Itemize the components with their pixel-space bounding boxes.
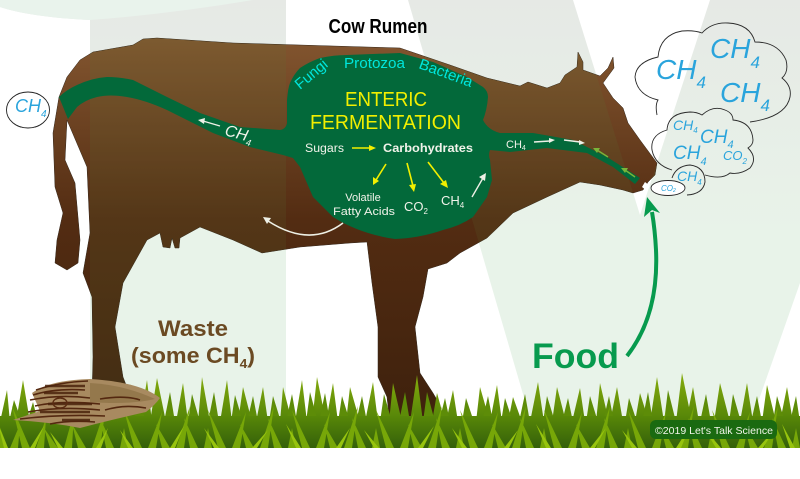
large methane cloud: CH	[710, 33, 750, 64]
food label: Food	[532, 337, 619, 376]
large methane cloud: 4	[750, 53, 760, 72]
tiny carbon dioxide cloud	[651, 180, 685, 196]
fermentation flow text: 4	[522, 145, 526, 152]
fermentation flow text: CH	[506, 139, 522, 151]
large methane cloud: CH	[656, 54, 696, 85]
waste label	[131, 316, 255, 371]
medium methane cloud: 4	[727, 139, 734, 151]
microbe labels: Protozoa	[344, 55, 406, 72]
medium methane cloud: CH	[700, 127, 727, 148]
medium methane cloud: CO	[723, 148, 742, 163]
medium methane cloud: CH	[673, 117, 693, 133]
tall grass tips	[0, 373, 793, 422]
heading: enteric fermentation: FERMENTATION	[310, 112, 461, 134]
waste label: 4	[240, 356, 248, 371]
mid grass blades	[0, 406, 800, 448]
large methane cloud: CH	[720, 77, 760, 108]
small methane cloud: CH	[677, 168, 697, 184]
small methane cloud: 4	[697, 178, 702, 187]
heading: enteric fermentation	[310, 89, 461, 134]
fermentation flow text: 2	[424, 207, 428, 216]
waste label: )	[247, 343, 255, 368]
left methane bubble	[6, 92, 50, 128]
microbe labels: Fungi	[292, 56, 331, 93]
fermentation flow text: Volatile	[345, 192, 381, 204]
rumen and digestive tract	[59, 53, 640, 239]
tiny carbon dioxide cloud: 2	[672, 188, 676, 194]
copyright badge	[650, 420, 777, 439]
yellow arrows	[352, 145, 448, 192]
grass base band	[0, 416, 800, 448]
cow	[52, 38, 658, 416]
medium methane cloud: 4	[700, 156, 707, 168]
foreground bright grass blades	[0, 424, 795, 448]
large methane cloud: 4	[696, 73, 706, 92]
fermentation flow text: Sugars	[305, 143, 344, 155]
small methane cloud	[672, 165, 705, 195]
large methane cloud	[635, 23, 790, 122]
fermentation flow text: Fatty Acids	[333, 206, 396, 218]
manure pile	[13, 379, 160, 428]
food arrow	[627, 197, 660, 356]
medium methane cloud: CH	[673, 143, 700, 164]
white arrows	[198, 118, 585, 235]
fermentation flow text: Carbohydrates	[383, 141, 473, 155]
medium methane cloud: 4	[693, 126, 698, 135]
tiny carbon dioxide cloud: CO	[661, 184, 673, 193]
medium methane cloud: 2	[742, 157, 748, 166]
waste label: (some CH	[131, 343, 234, 368]
medium methane cloud	[652, 108, 754, 177]
fermentation flow text: CO	[404, 199, 424, 214]
fermentation flow text: CH	[223, 122, 250, 145]
fermentation flow text: CH	[441, 193, 460, 208]
mouth gap	[642, 182, 650, 191]
fermentation flow text	[222, 122, 526, 218]
copyright badge: ©2019 Let's Talk Science	[655, 425, 773, 437]
green return arrows	[593, 148, 635, 177]
waste label: Waste	[158, 316, 228, 341]
heading: enteric fermentation: ENTERIC	[345, 89, 427, 111]
fermentation flow text: 4	[460, 201, 465, 210]
microbe labels	[292, 55, 476, 93]
grass	[0, 373, 800, 448]
title: Cow Rumen	[328, 16, 428, 38]
cow body	[53, 38, 657, 425]
microbe labels: Bacteria	[417, 56, 476, 91]
fermentation flow text: 4	[245, 137, 252, 148]
large methane cloud: 4	[760, 96, 770, 115]
left methane bubble: CH	[15, 96, 41, 116]
left methane bubble: 4	[41, 109, 47, 120]
